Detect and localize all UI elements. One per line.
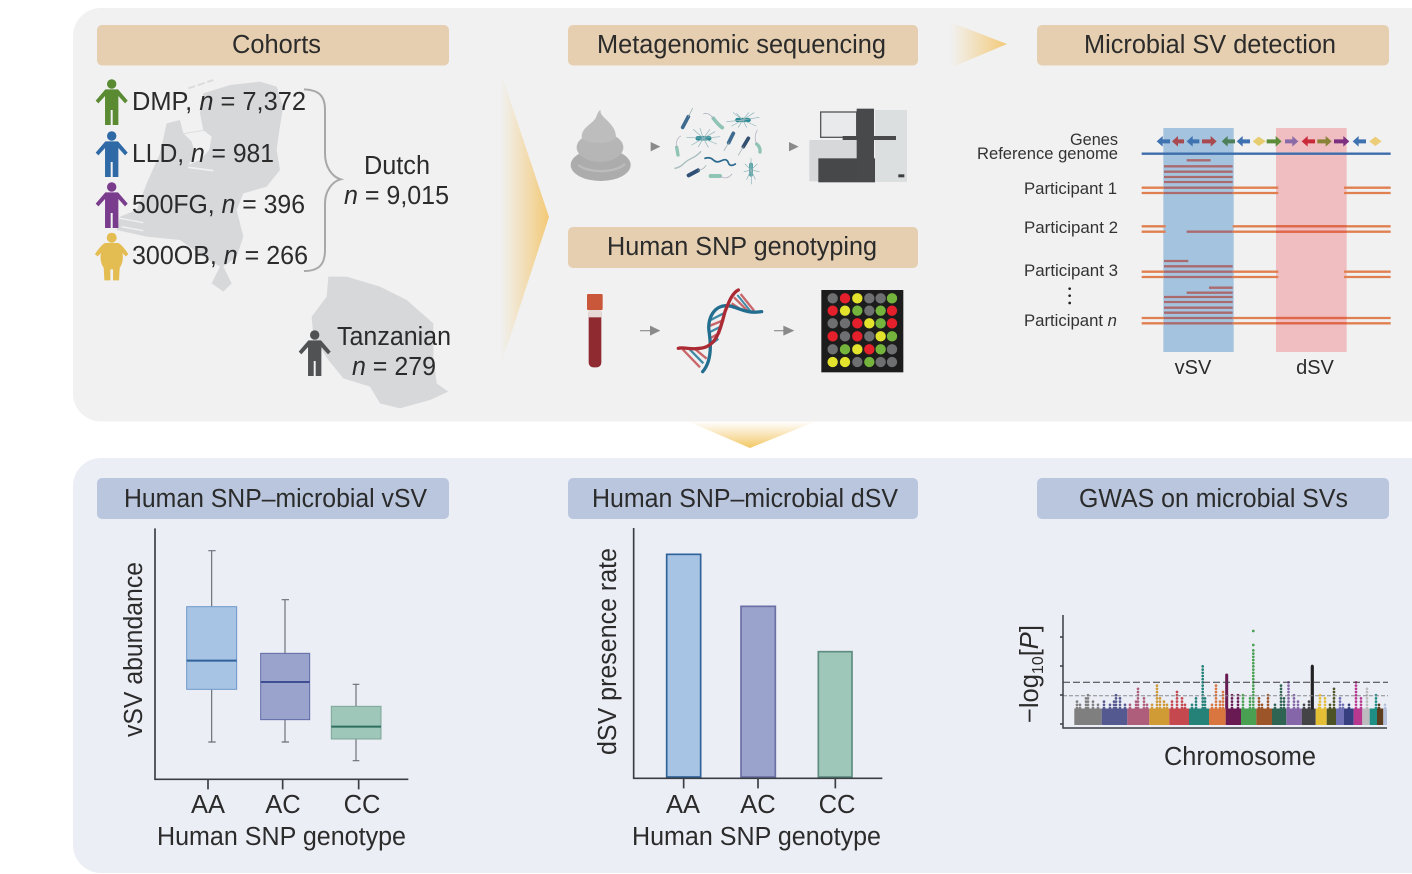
- dots between participants: [1068, 287, 1071, 304]
- arrow: sequencing to detection: [950, 22, 1007, 68]
- category labels: AA: [666, 791, 700, 819]
- region: vSV band: [1163, 128, 1234, 352]
- reads in dSV region: [1276, 226, 1347, 323]
- header: Metagenomic sequencing: Metagenomic sequencing: [597, 31, 886, 59]
- header: Metagenomic sequencing: [568, 25, 918, 66]
- significance thresholds: [1063, 682, 1388, 696]
- label: Reference genome: Reference genome: [977, 145, 1118, 163]
- header: Human SNP-microbial dSV: Human SNP–microbial dSV: [592, 485, 898, 513]
- icon: SNP microarray: [821, 290, 903, 372]
- workflow: SNP genotyping icons: [587, 290, 903, 372]
- map: Tanzania: [312, 277, 448, 408]
- icon: sequencer: [809, 109, 907, 182]
- category labels: [666, 791, 855, 819]
- label: dSV: dSV: [1296, 357, 1335, 379]
- category labels: CC: [819, 791, 855, 819]
- label: Genes: Genes: [1070, 131, 1118, 149]
- chart: vSV abundance box plot: [120, 528, 408, 851]
- category labels: [191, 791, 380, 819]
- category labels: AA: [191, 791, 225, 819]
- header: Human SNP genotyping: [568, 227, 918, 268]
- x-axis label: Chromosome: [1164, 743, 1316, 771]
- workflow: metagenomic sequencing icons: [571, 108, 907, 184]
- box: AA: [187, 551, 237, 742]
- arrow: DNA to array: [774, 326, 794, 336]
- icon: blood tube: [587, 294, 603, 367]
- association points: [1077, 629, 1385, 708]
- label: Dutch total: n = 9,015: [344, 182, 449, 210]
- header: Cohorts: [97, 25, 449, 66]
- header: GWAS on microbial SVs: GWAS on microbial SVs: [1079, 485, 1348, 513]
- label: Dutch total: Dutch: [364, 152, 430, 180]
- box: AC: [261, 600, 310, 742]
- header: Microbial SV detection: [1037, 25, 1389, 66]
- icon: Tanzanian person: [299, 330, 331, 376]
- cohort group: 500FG: 500FG, n = 396: [132, 191, 305, 219]
- cohort group: DMP: DMP, n = 7,372: [132, 88, 306, 116]
- category labels: CC: [344, 791, 380, 819]
- header: Human SNP-microbial vSV: [97, 478, 449, 519]
- category labels: AC: [740, 791, 776, 819]
- arrow: tube to DNA: [640, 326, 660, 336]
- header: GWAS on microbial SVs: [1037, 478, 1389, 519]
- bar: AA: [667, 554, 701, 777]
- icon: stool sample: [571, 110, 631, 181]
- label: Participant 1: Participant 1: [1024, 180, 1117, 198]
- x-axis label: Human SNP genotype: [157, 823, 406, 851]
- header: Microbial SV detection: Microbial SV detection: [1084, 31, 1336, 59]
- cohort group: LLD: LLD, n = 981: [132, 140, 274, 168]
- bar: AC: [741, 606, 775, 777]
- label: Participant n: Participant n: [1024, 312, 1117, 330]
- bar: CC: [818, 652, 852, 777]
- cohort group: 300OB: 300OB, n = 266: [132, 242, 308, 270]
- label: vSV: vSV: [1175, 357, 1212, 379]
- y-axis label: [: [1016, 649, 1044, 656]
- cohort group: LLD: [96, 131, 274, 177]
- label: Tanzanian total: n = 279: [352, 353, 436, 381]
- header: Human SNP genotyping: Human SNP genotyping: [607, 233, 877, 261]
- y-axis label: vSV abundance: [120, 562, 148, 737]
- box: CC: [331, 684, 381, 761]
- icon: microbes: [675, 108, 760, 184]
- arrow: workflow to analyses: [687, 421, 817, 448]
- y-axis label: 10: [1030, 656, 1047, 674]
- label: Tanzanian total: Tanzanian: [337, 323, 451, 351]
- label: Tanzanian total: [337, 323, 451, 381]
- diagram: SV read alignment: [1068, 128, 1391, 352]
- label: Dutch total: [344, 152, 449, 210]
- y-axis label: P]: [1016, 625, 1044, 649]
- label: Participant 2: Participant 2: [1024, 219, 1118, 237]
- brace: Dutch cohorts: [304, 89, 341, 271]
- cohort group: 500FG: [96, 182, 305, 228]
- header: Human SNP-microbial dSV: [568, 478, 918, 519]
- header: Cohorts: Cohorts: [232, 31, 321, 59]
- arrow: cohorts to sequencing: [500, 70, 549, 368]
- axes: [155, 528, 408, 789]
- panel: data generation: [73, 8, 1412, 422]
- y-axis label: dSV presence rate: [594, 548, 622, 755]
- reads in vSV region: [1164, 160, 1233, 323]
- chromosome bars: [1074, 708, 1387, 725]
- region: dSV band: [1276, 128, 1347, 352]
- chart: Manhattan plot: [1016, 615, 1388, 771]
- y-axis label: −log: [1016, 674, 1044, 723]
- panel: association analyses: [73, 458, 1412, 873]
- category labels: AC: [265, 791, 301, 819]
- cohort group: 300OB: [95, 233, 308, 280]
- chart: dSV presence rate bars: [594, 528, 882, 851]
- gene arrows: [1157, 136, 1382, 147]
- reference genome line: [1142, 150, 1391, 157]
- axes: [634, 528, 882, 788]
- arrow: microbes to sequencer: [789, 142, 799, 151]
- cohort group: DMP: [96, 79, 306, 125]
- label: Participant 3: Participant 3: [1024, 262, 1118, 280]
- icon: DNA helix: [678, 290, 762, 372]
- x-axis label: Human SNP genotype: [632, 823, 881, 851]
- header: Human SNP-microbial vSV: Human SNP–microbial vSV: [124, 485, 427, 513]
- reads outside variable regions: [1142, 188, 1391, 323]
- arrow: stool to microbes: [651, 142, 660, 151]
- map: Netherlands: [117, 80, 283, 292]
- axes: [1060, 615, 1387, 728]
